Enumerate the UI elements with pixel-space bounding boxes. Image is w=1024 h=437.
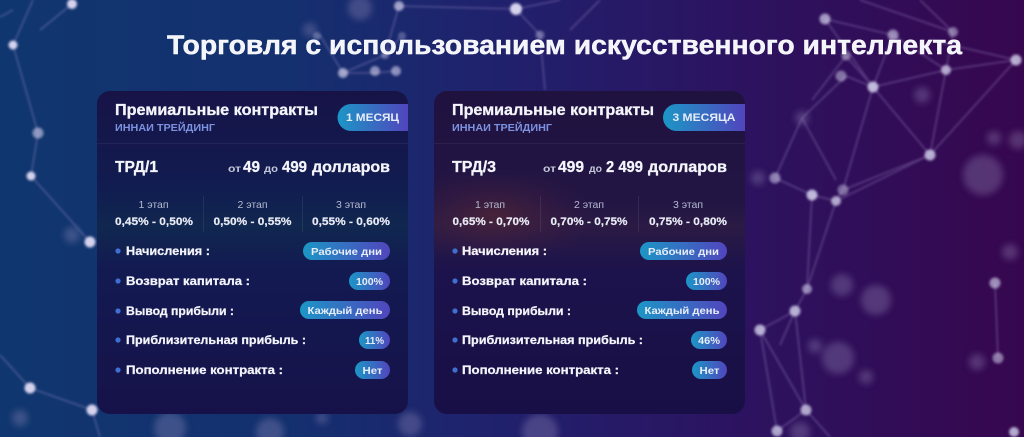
stage rates: 2 этап	[237, 199, 268, 211]
price range: 499	[558, 159, 584, 176]
price range: от	[543, 163, 556, 175]
row: approximate profit: Приблизительная прибыль :	[462, 333, 643, 347]
row: accrual: Рабочие дни	[648, 246, 719, 258]
row: capital return: Возврат капитала :	[462, 274, 587, 288]
row: approximate profit	[452, 331, 727, 349]
stage rates: 0,75% - 0,80%	[649, 216, 727, 228]
row: top up	[115, 361, 390, 379]
row: accrual	[452, 242, 727, 260]
row: withdrawal: Каждый день	[644, 305, 720, 317]
price range: долларов	[648, 159, 727, 176]
contract name: ТРД/3	[452, 159, 496, 176]
panel: 3 month contract	[434, 91, 745, 414]
row: withdrawal: Вывод прибыли :	[126, 304, 234, 318]
row: withdrawal: Каждый день	[308, 305, 383, 317]
price range: 499	[282, 159, 307, 176]
price range: долларов	[312, 159, 390, 176]
badge: duration: 3 МЕСЯЦА	[672, 112, 736, 124]
row: approximate profit: 11%	[365, 335, 385, 347]
warm tint	[434, 175, 604, 255]
row: accrual: Начисления :	[126, 244, 210, 258]
price range	[228, 159, 390, 176]
row: approximate profit: Приблизительная прибыль :	[126, 333, 306, 347]
stage rates: 0,65% - 0,70%	[452, 216, 530, 228]
row: top up: Нет	[700, 365, 720, 377]
header divider	[97, 143, 408, 144]
price range: до	[589, 163, 602, 175]
price range: 49	[243, 159, 260, 176]
row: top up: Пополнение контракта :	[126, 363, 283, 377]
row: capital return: Возврат капитала :	[126, 274, 250, 288]
row: accrual: Рабочие дни	[311, 246, 382, 258]
badge: duration: 1 МЕСЯЦ	[346, 112, 399, 124]
stage rates: 2 этап	[574, 199, 604, 211]
row: top up: Нет	[362, 365, 382, 377]
panel background	[97, 91, 408, 414]
contract name: ТРД/1	[115, 159, 158, 176]
row: withdrawal: Вывод прибыли :	[462, 304, 571, 318]
row: capital return: 100%	[356, 276, 384, 288]
row: top up	[452, 361, 727, 379]
stage rates: 1 этап	[138, 199, 169, 211]
price range: от	[228, 163, 241, 175]
stage rates: 0,45% - 0,50%	[115, 216, 193, 228]
stage rates: 1 этап	[475, 199, 505, 211]
header divider	[434, 143, 745, 144]
price range	[543, 159, 727, 176]
badge: duration	[663, 104, 745, 131]
stage rates: 0,70% - 0,75%	[550, 216, 628, 228]
price range: до	[264, 163, 278, 175]
badge: duration	[338, 104, 408, 131]
row: capital return	[115, 272, 390, 290]
stage rates: 3 этап	[673, 199, 703, 211]
stage rates: 0,55% - 0,60%	[312, 216, 390, 228]
row: accrual	[115, 242, 390, 260]
card heading: Премиальные контракты	[115, 102, 318, 119]
row: capital return	[452, 272, 727, 290]
row: capital return: 100%	[693, 276, 721, 288]
panel background	[434, 91, 745, 414]
row: accrual: Начисления :	[462, 244, 547, 258]
panel: 1 month contract	[97, 91, 408, 414]
stage rates: 3 этап	[336, 199, 366, 211]
row: top up: Пополнение контракта :	[462, 363, 619, 377]
card subheading: ИННАИ ТРЕЙДИНГ	[452, 121, 552, 134]
title: Торговля с использованием искусственного интеллекта	[167, 30, 962, 60]
row: approximate profit	[115, 331, 390, 349]
card subheading: ИННАИ ТРЕЙДИНГ	[115, 121, 215, 134]
row: approximate profit: 46%	[698, 335, 721, 347]
row: withdrawal	[115, 301, 390, 319]
row: withdrawal	[452, 301, 727, 319]
stage rates	[452, 196, 727, 232]
card heading: Премиальные контракты	[452, 102, 654, 119]
stage rates	[115, 196, 390, 232]
stage rates: 0,50% - 0,55%	[214, 216, 292, 228]
price range: 2 499	[606, 159, 643, 176]
